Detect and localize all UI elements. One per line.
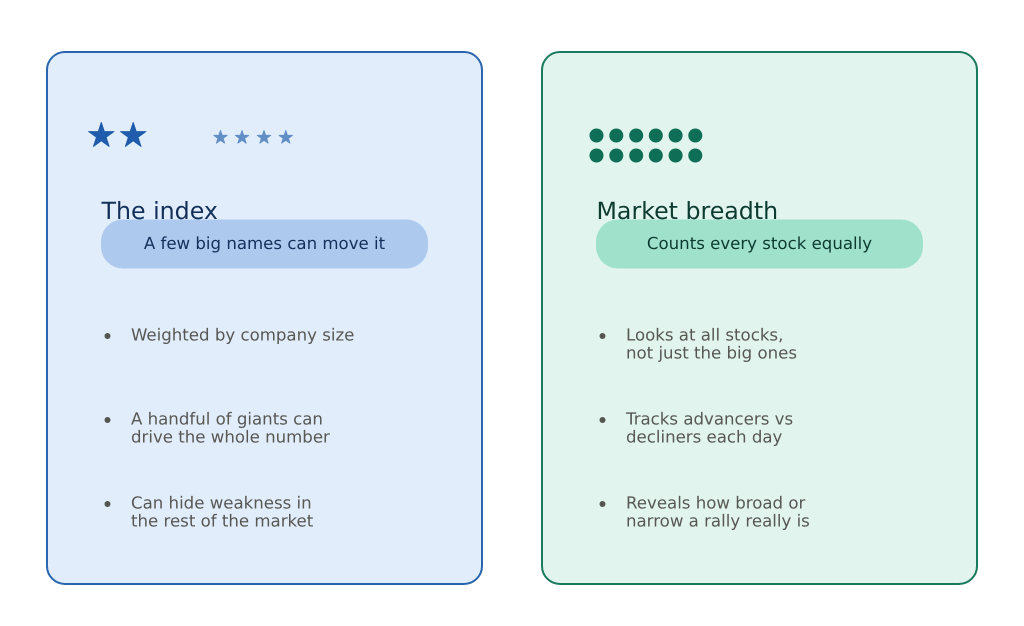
bullet: a handful of giants: A handful of giants can	[131, 409, 323, 428]
bullet: a handful of giants: drive the whole number	[131, 428, 330, 446]
bullet: a handful of giants	[104, 409, 330, 446]
pill: counts every stock equally	[596, 220, 923, 268]
panel: the index	[47, 52, 482, 584]
pill: a few big names: A few big names can move it	[144, 234, 386, 253]
heading: market breadth: Market breadth	[596, 197, 778, 225]
heading: the index: The index	[100, 197, 218, 225]
bullet: can hide weakness: the rest of the market	[131, 511, 314, 530]
pill: a few big names	[101, 220, 428, 268]
panel: market breadth	[542, 52, 977, 584]
bullet: looks at all stocks: Looks at all stocks,	[626, 325, 783, 344]
icon: twelve dots	[590, 128, 702, 162]
bullet: reveals how broad: narrow a rally really is	[626, 511, 810, 530]
icon: two large stars	[89, 122, 146, 146]
bullet: looks at all stocks	[600, 325, 797, 362]
bullet: reveals how broad: Reveals how broad or	[626, 493, 806, 512]
bullet: tracks advancers: Tracks advancers vs	[625, 409, 793, 428]
bullet: tracks advancers: decliners each day	[626, 428, 783, 446]
bullet: looks at all stocks: not just the big ones	[626, 344, 797, 362]
bullet: can hide weakness	[104, 493, 314, 530]
panel background	[47, 52, 482, 584]
bullet: tracks advancers	[600, 409, 793, 446]
bullet: reveals how broad	[600, 493, 810, 530]
pill: counts every stock equally: Counts every stock equally	[647, 234, 872, 253]
icon: four small stars	[214, 130, 292, 143]
bullet: weighted by company size: Weighted by company size	[131, 326, 354, 345]
bullet: can hide weakness: Can hide weakness in	[131, 493, 312, 512]
panel background	[542, 52, 977, 584]
